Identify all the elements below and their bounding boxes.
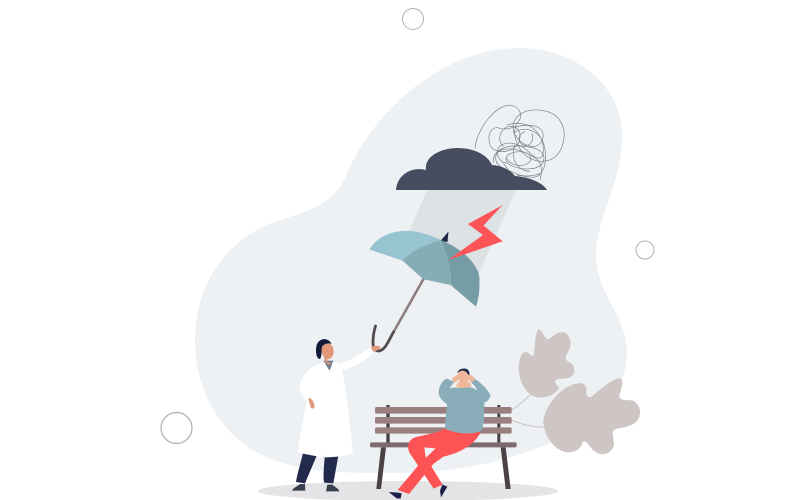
- light beam under cloud: [409, 190, 516, 280]
- leaf lower: [543, 378, 640, 454]
- doctor shoes: [292, 484, 339, 491]
- storm cloud: [396, 148, 547, 190]
- doctor neck and shirt: [323, 361, 333, 371]
- man's shoes: [389, 485, 447, 499]
- decorative circle left: [161, 412, 192, 444]
- doctor head: [320, 342, 334, 365]
- bench back posts: [386, 405, 500, 443]
- doctor figure: [292, 339, 381, 491]
- leaf stems: [510, 394, 545, 427]
- umbrella dark panel: [441, 240, 480, 307]
- bench slats: [375, 407, 512, 434]
- doctor raised hand: [371, 346, 381, 352]
- umbrella handle: [373, 326, 394, 351]
- umbrella middle panel: [403, 240, 451, 285]
- park bench: [370, 405, 517, 489]
- umbrella: [370, 231, 480, 351]
- bench seat: [370, 442, 517, 447]
- leaf upper: [519, 330, 574, 398]
- decorative circle right: [636, 241, 654, 259]
- doctor hair: [316, 339, 332, 359]
- scribble of tangled thoughts: [475, 105, 564, 180]
- man's head: [458, 370, 470, 384]
- doctor trousers: [296, 452, 339, 483]
- umbrella shaft: [393, 279, 424, 333]
- ground shadow: [258, 481, 558, 500]
- bench legs: [376, 447, 511, 489]
- umbrella light panel: [370, 231, 441, 261]
- lightning bolt: [448, 205, 503, 260]
- man's hair: [457, 369, 470, 377]
- man's neck: [456, 382, 472, 388]
- seated man: [389, 369, 490, 499]
- man's hands: [452, 375, 475, 383]
- man's sweater: [439, 378, 490, 433]
- doctor white coat: [297, 347, 374, 457]
- man's red trousers: [398, 429, 481, 494]
- decorative circle top: [402, 8, 424, 30]
- doctor hand on hip: [308, 398, 315, 408]
- umbrella tip: [440, 232, 448, 242]
- background blob: [195, 48, 627, 473]
